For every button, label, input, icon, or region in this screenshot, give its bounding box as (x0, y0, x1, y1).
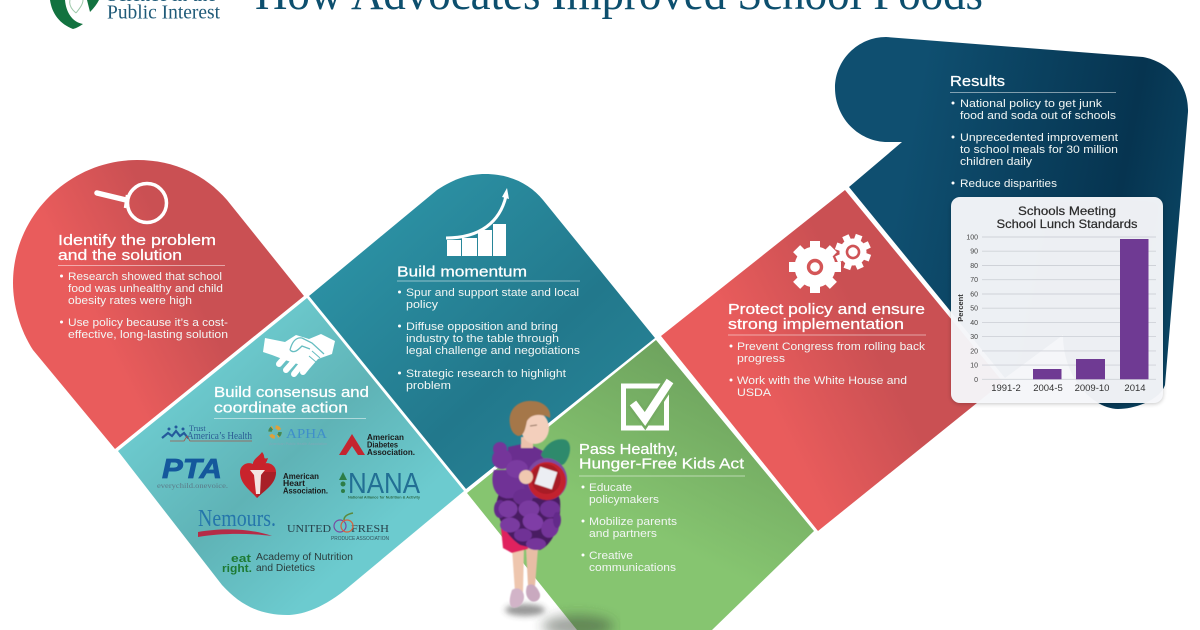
head and hair (510, 401, 550, 448)
shadow (505, 604, 614, 630)
chart x axis labels: 2014 (1124, 383, 1146, 394)
chart y axis labels: 30 (970, 334, 978, 341)
logo: APHA (269, 427, 328, 446)
momentum bullets (398, 287, 580, 392)
momentum bullets: Strategic research to highlight (406, 368, 567, 380)
act bullets: communications (589, 562, 676, 574)
logo: American Diabetes Association: Association. (367, 448, 415, 457)
identify bullets: obesity rates were high (68, 295, 192, 307)
logo: Trust for America's Health: Trust (189, 424, 206, 433)
panel: build consensus (118, 298, 464, 615)
photo: child in grape costume (492, 401, 614, 630)
act bullets (582, 482, 677, 574)
chart y axis labels: 0 (974, 377, 978, 384)
chart bars (1033, 239, 1148, 379)
logo: eat right Academy of Nutrition and Dietetics: eat (231, 553, 251, 565)
chart y axis labels: 100 (966, 234, 978, 242)
logo: United Fresh: FRESH (351, 524, 389, 535)
chart x axis labels (991, 383, 1146, 394)
chart y axis labels: 50 (970, 306, 978, 313)
chart gridlines (982, 237, 1156, 379)
logo: American Diabetes Association: American (367, 433, 404, 442)
costume body (492, 442, 562, 550)
logo: Trust for America's Health: America’s Health (187, 430, 252, 442)
icon: handshake (263, 334, 335, 374)
panel: identify the problem: and the solution (58, 247, 182, 264)
chart title: Schools Meeting (1018, 204, 1116, 218)
act bullets: and partners (589, 528, 657, 540)
logo: eat right Academy of Nutrition and Dietetics (222, 552, 353, 575)
identify bullets (60, 271, 228, 341)
identify bullets: Research showed that school (68, 271, 222, 283)
logo: United Fresh (287, 513, 389, 542)
protect bullets: Work with the White House and (737, 375, 907, 387)
results bullets: National policy to get junk (960, 98, 1102, 110)
act bullets: policymakers (589, 494, 659, 506)
chart x axis labels: 2009-10 (1075, 383, 1109, 394)
logo: Nemours: Nemours. (198, 506, 276, 532)
legs and shoes (510, 548, 540, 607)
momentum bullets: policy (406, 299, 438, 311)
identify heading: Identify the problem (58, 232, 216, 249)
skirt (501, 528, 530, 553)
logo: Science in the Public Interest (50, 0, 220, 29)
results bullets: food and soda out of schools (960, 110, 1116, 122)
logo: PTA: PTA (162, 453, 222, 484)
momentum bullets: legal challenge and negotiations (406, 345, 580, 357)
protect bullets (730, 341, 925, 399)
identify bullets: Use policy because it’s a cost- (68, 317, 228, 329)
logo: Science in the Public Interest: Public Interest (107, 2, 220, 24)
results bullets (952, 98, 1119, 190)
logo: American Heart Association: American (283, 472, 319, 481)
logo: NANA: National Alliance for Nutrition & Activity (348, 494, 421, 500)
act bullets: Creative (589, 550, 633, 562)
protect bullets: Prevent Congress from rolling back (737, 341, 925, 353)
icon: gears (789, 229, 876, 293)
chart y axis title: Percent (956, 294, 965, 322)
logo: United Fresh: PRODUCE ASSOCIATION (331, 536, 389, 542)
panel: build consensus: coordinate action (214, 400, 348, 416)
panel: results (835, 37, 1188, 409)
identify bullets: effective, long-lasting solution (68, 329, 228, 341)
chart title: School Lunch Standards (996, 217, 1138, 231)
icon: checkbox (624, 381, 670, 428)
panel: identify the problem (13, 160, 304, 449)
logo: PTA: everychild.onevoice. (157, 482, 228, 490)
icon: magnifying glass (97, 184, 166, 222)
results heading: Results (950, 73, 1005, 90)
logo: APHA: American Public Health Association (269, 442, 327, 446)
chart y axis labels: 20 (970, 348, 978, 355)
chart y axis labels: 80 (970, 263, 978, 270)
chart y axis labels: 60 (970, 292, 978, 298)
protect bullets: USDA (737, 387, 771, 399)
momentum bullets: industry to the table through (406, 333, 559, 345)
plate and paper (521, 452, 573, 506)
logo: PTA (157, 453, 228, 490)
results bullets: Reduce disparities (960, 178, 1057, 190)
logo: American Heart Association (240, 452, 328, 498)
results bullets: to school meals for 30 million (960, 144, 1118, 156)
momentum heading: Build momentum (397, 264, 527, 280)
act heading: Pass Healthy, (579, 441, 678, 458)
results bullets: Unprecedented improvement (960, 132, 1119, 144)
panel: protect policy (661, 190, 1003, 531)
chart y axis labels: 10 (970, 363, 978, 370)
logo: eat right Academy of Nutrition and Dietetics: Academy of Nutrition (256, 552, 353, 563)
chart x axis labels: 1991-2 (991, 383, 1021, 394)
logo: American Diabetes Association (339, 433, 415, 457)
logo: eat right Academy of Nutrition and Dietetics: and Dietetics (256, 563, 315, 574)
logo: American Diabetes Association: Diabetes (367, 440, 399, 450)
momentum bullets: Spur and support state and local (406, 287, 579, 299)
logo: NANA: NANA (348, 468, 421, 500)
act bullets: Educate (589, 482, 632, 494)
panel: build momentum (309, 174, 655, 489)
bar chart card (951, 197, 1163, 404)
panel: pass healthy hunger-free kids act (467, 340, 814, 630)
momentum bullets: Diffuse opposition and bring (406, 321, 558, 333)
protect bullets: progress (737, 353, 785, 365)
logo: Trust for America's Health (162, 424, 252, 442)
chart title (996, 204, 1138, 231)
logo: APHA: APHA (286, 427, 328, 442)
chart y axis labels: 90 (970, 249, 978, 256)
chart y axis labels: 40 (970, 320, 978, 327)
icon: rising chart (446, 188, 509, 256)
consensus heading: Build consensus and (214, 384, 369, 401)
logo: American Heart Association: Heart (283, 479, 305, 488)
chart x axis labels: 2004-5 (1033, 383, 1063, 394)
chart y axis labels (966, 234, 978, 384)
protect heading: Protect policy and ensure (728, 301, 925, 318)
act bullets: Mobilize parents (589, 516, 677, 528)
results bullets: children daily (960, 156, 1032, 168)
logo: American Heart Association: Association. (283, 486, 328, 496)
logo: eat right Academy of Nutrition and Dietetics: right. (222, 563, 252, 575)
chart y axis labels: 70 (970, 277, 978, 284)
costume leaf (541, 439, 570, 466)
panel: pass healthy hunger-free kids act: Hunger-Free Kids Act (579, 456, 745, 472)
hand (519, 470, 533, 484)
panel: protect policy: strong implementation (728, 316, 904, 333)
logo: United Fresh: UNITED (287, 524, 331, 535)
identify bullets: food was unhealthy and child (68, 283, 223, 295)
momentum bullets: problem (406, 380, 451, 392)
